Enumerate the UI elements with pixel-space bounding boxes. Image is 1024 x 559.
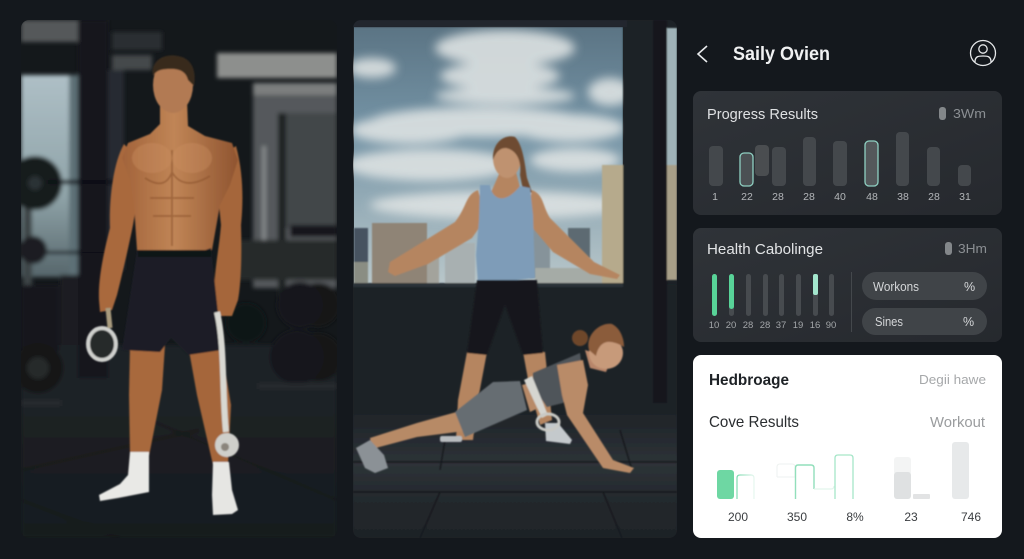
bar labels: 1 (712, 191, 718, 203)
window view with clouds and city (345, 20, 677, 538)
section heading: Cove Results (709, 414, 799, 431)
chart labels: 746 (961, 510, 981, 524)
thin bar labels: 10 (709, 320, 719, 331)
bar chart (709, 132, 971, 186)
chart labels: 23 (904, 510, 918, 524)
bar labels: 38 (897, 191, 909, 203)
panel: white results card (693, 355, 1002, 538)
heading: Health Cabolinge (707, 241, 823, 258)
neck and torso (122, 100, 238, 250)
pill: sines (862, 308, 987, 335)
bar labels: 22 (741, 191, 753, 203)
measuring tape loop (88, 328, 116, 360)
thin bar chart (712, 274, 834, 316)
bar labels: 28 (928, 191, 940, 203)
pill: sines: % (963, 315, 974, 329)
card tag: Degii hawe (919, 373, 986, 387)
gym background (21, 20, 337, 474)
panel: man in gym photo (8, 20, 342, 538)
thin bar labels: 37 (776, 320, 786, 331)
socks (99, 452, 149, 501)
bar labels: 40 (834, 191, 846, 203)
head (152, 68, 194, 112)
bar labels: 28 (772, 191, 784, 203)
duration tag (939, 106, 986, 121)
bar labels: 28 (803, 191, 815, 203)
thin bar labels: 28 (760, 320, 770, 331)
icon: user profile (970, 40, 996, 66)
thin bar labels: 90 (826, 320, 836, 331)
chart labels (728, 510, 981, 524)
app header (698, 40, 996, 66)
standing woman (388, 136, 620, 444)
chart labels: 200 (728, 510, 748, 524)
legs (129, 345, 165, 456)
pill: workouts: % (964, 280, 975, 294)
pill: workouts: Workons (873, 280, 919, 294)
measuring tape strip (217, 312, 226, 432)
thin bar labels: 19 (793, 320, 803, 331)
chart labels: 350 (787, 510, 807, 524)
heading: Progress Results (707, 106, 818, 123)
thin bar labels: 16 (810, 320, 820, 331)
pill: sines: Sines (875, 315, 903, 329)
bar labels (712, 191, 971, 203)
pill: workouts (862, 272, 987, 300)
bar labels: 31 (959, 191, 971, 203)
card heading: Hedbroage (709, 372, 789, 389)
bar labels: 48 (866, 191, 878, 203)
duration tag: 3Hm (958, 241, 987, 256)
results chart (717, 442, 969, 499)
duration tag: 3Wm (953, 106, 986, 121)
duration tag (945, 241, 987, 256)
measuring tape roll (215, 433, 239, 457)
shorts (122, 248, 222, 355)
icon: back chevron (698, 46, 707, 62)
man figure (88, 55, 242, 515)
app title: Saily Ovien (733, 44, 830, 65)
panel: progress results (693, 91, 1002, 215)
thin bar labels: 20 (726, 320, 736, 331)
panel: health challenge (693, 228, 1002, 342)
thin bar labels: 28 (743, 320, 753, 331)
plank woman (356, 324, 634, 473)
section tag: Workout (930, 414, 986, 431)
left arm (99, 144, 138, 312)
thin bar labels (709, 320, 836, 331)
right arm (214, 146, 242, 316)
chart labels: 8% (846, 510, 864, 524)
panel: women exercising photo (345, 20, 677, 538)
